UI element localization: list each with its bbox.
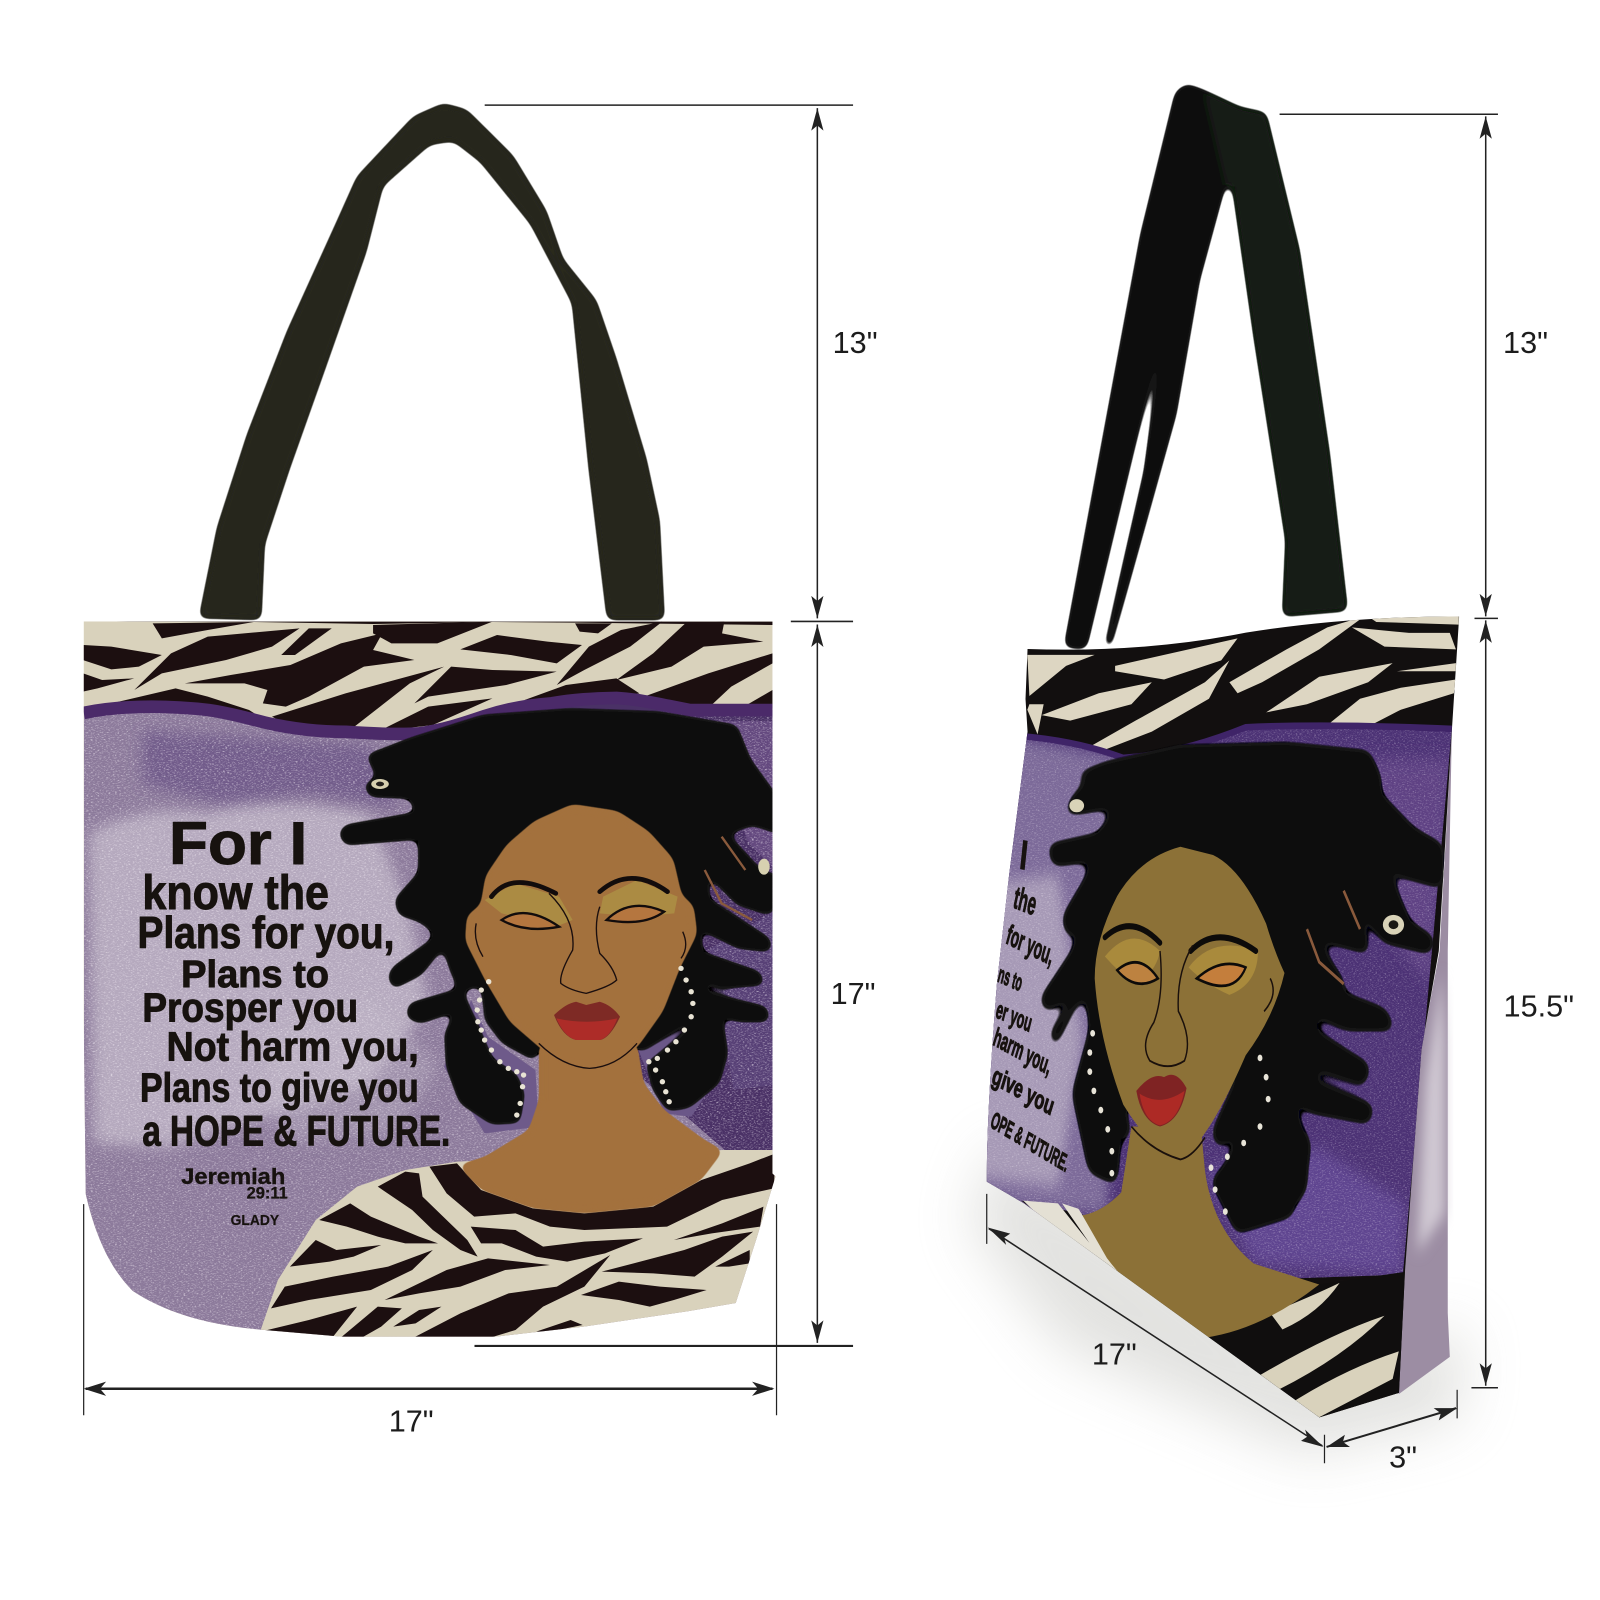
dimension: front body height 17 inches: 17" [831,977,876,1011]
drop shadow [969,1143,1464,1454]
lavender left side [986,740,1116,1215]
verse text on front bag: Plans for you, [138,909,394,958]
purple field [986,729,1452,1278]
verse text on angled bag: the [1011,880,1040,922]
verse text on front bag: a HOPE & FUTURE. [142,1107,450,1155]
lavender highlights [89,804,438,1148]
panel: front view of tote bag [71,103,786,1347]
hair mass [341,710,783,1125]
verse text on angled bag: for you, [1003,919,1057,972]
verse text on angled bag: harm you, [990,1022,1055,1080]
face [468,807,695,1068]
panel: angled view of tote bag [948,83,1466,1454]
nose and face lines [1131,946,1273,1159]
verse text on front bag: For I [169,809,307,877]
neck and shoulders [458,1043,724,1213]
verse text on angled bag: ns to [995,961,1025,997]
verse text on front bag: Jeremiah [181,1164,285,1189]
verse text on angled bag: give you [989,1061,1058,1121]
verse text on front bag: Not harm you, [167,1023,419,1069]
dimension: depth 3 inches [1327,1390,1457,1474]
neck and shoulders [1082,1127,1319,1338]
verse text on front bag: GLADY [231,1213,279,1229]
dimension: depth 3 inches: 3" [1389,1440,1417,1474]
verse text on angled bag: OPE & FUTURE. [988,1107,1072,1177]
dark purple right side [545,692,776,1162]
dimension: front width 17 inches [84,1204,777,1439]
nose and face lines [475,893,686,1068]
verse text on front bag: Plans to [181,954,329,996]
lips [554,1002,620,1040]
earrings [474,966,696,1118]
dimension: front width 17 inches: 17" [389,1405,434,1439]
verse text on front bag: Plans to give you [140,1065,419,1111]
left crescent behind earring [444,1000,539,1133]
icon: side view handles [1063,83,1348,650]
hair mass [1042,745,1442,1233]
bead accents [1069,799,1084,812]
verse text on angled bag [990,840,1068,1172]
verse text on front bag: Prosper you [142,985,358,1031]
eye shadow and eyes [485,883,573,927]
icon: front bag body [71,612,786,1347]
face [1095,847,1284,1159]
dimension: diagonal width 17 inches [987,1194,1324,1463]
top zebra stripes [83,622,773,732]
copper accents [705,837,752,920]
dimension: side handle height 13 inches [1280,114,1548,616]
lips [1136,1075,1187,1127]
verse text on front bag: know the [142,866,329,920]
dimension: front handle height 13 inches: 13" [833,326,878,360]
icon: front bag handle [198,103,665,620]
bottom zebra [1021,1201,1405,1420]
lighter purple on right [1205,1148,1405,1275]
bottom zebra stripes [261,1150,777,1338]
icon: angled bag body [948,611,1466,1423]
earrings [1087,1030,1271,1215]
right crescent behind earring [638,1031,725,1117]
dimension: side body height 15.5 inches: 15.5" [1504,989,1574,1023]
verse text on front bag: 29:11 [247,1185,288,1203]
copper accents [1307,891,1360,984]
dimension: front handle height 13 inches [485,105,878,618]
icon: side panel of bag [1399,729,1452,1394]
dimension: side handle height 13 inches: 13" [1503,326,1548,360]
dimension: side body height 15.5 inches [1471,618,1574,1388]
purple field [79,692,782,1346]
eye shadow and eyes [1105,938,1160,970]
dimension: front body height 17 inches [474,621,876,1346]
verse text on angled bag: er you [993,995,1035,1037]
dimension: diagonal width 17 inches: 17" [1092,1337,1137,1371]
top zebra stripes [1027,616,1459,754]
verse text on front bag [138,809,450,1229]
verse text on angled bag: I [1017,831,1031,879]
hair, face and earrings [341,710,783,1213]
